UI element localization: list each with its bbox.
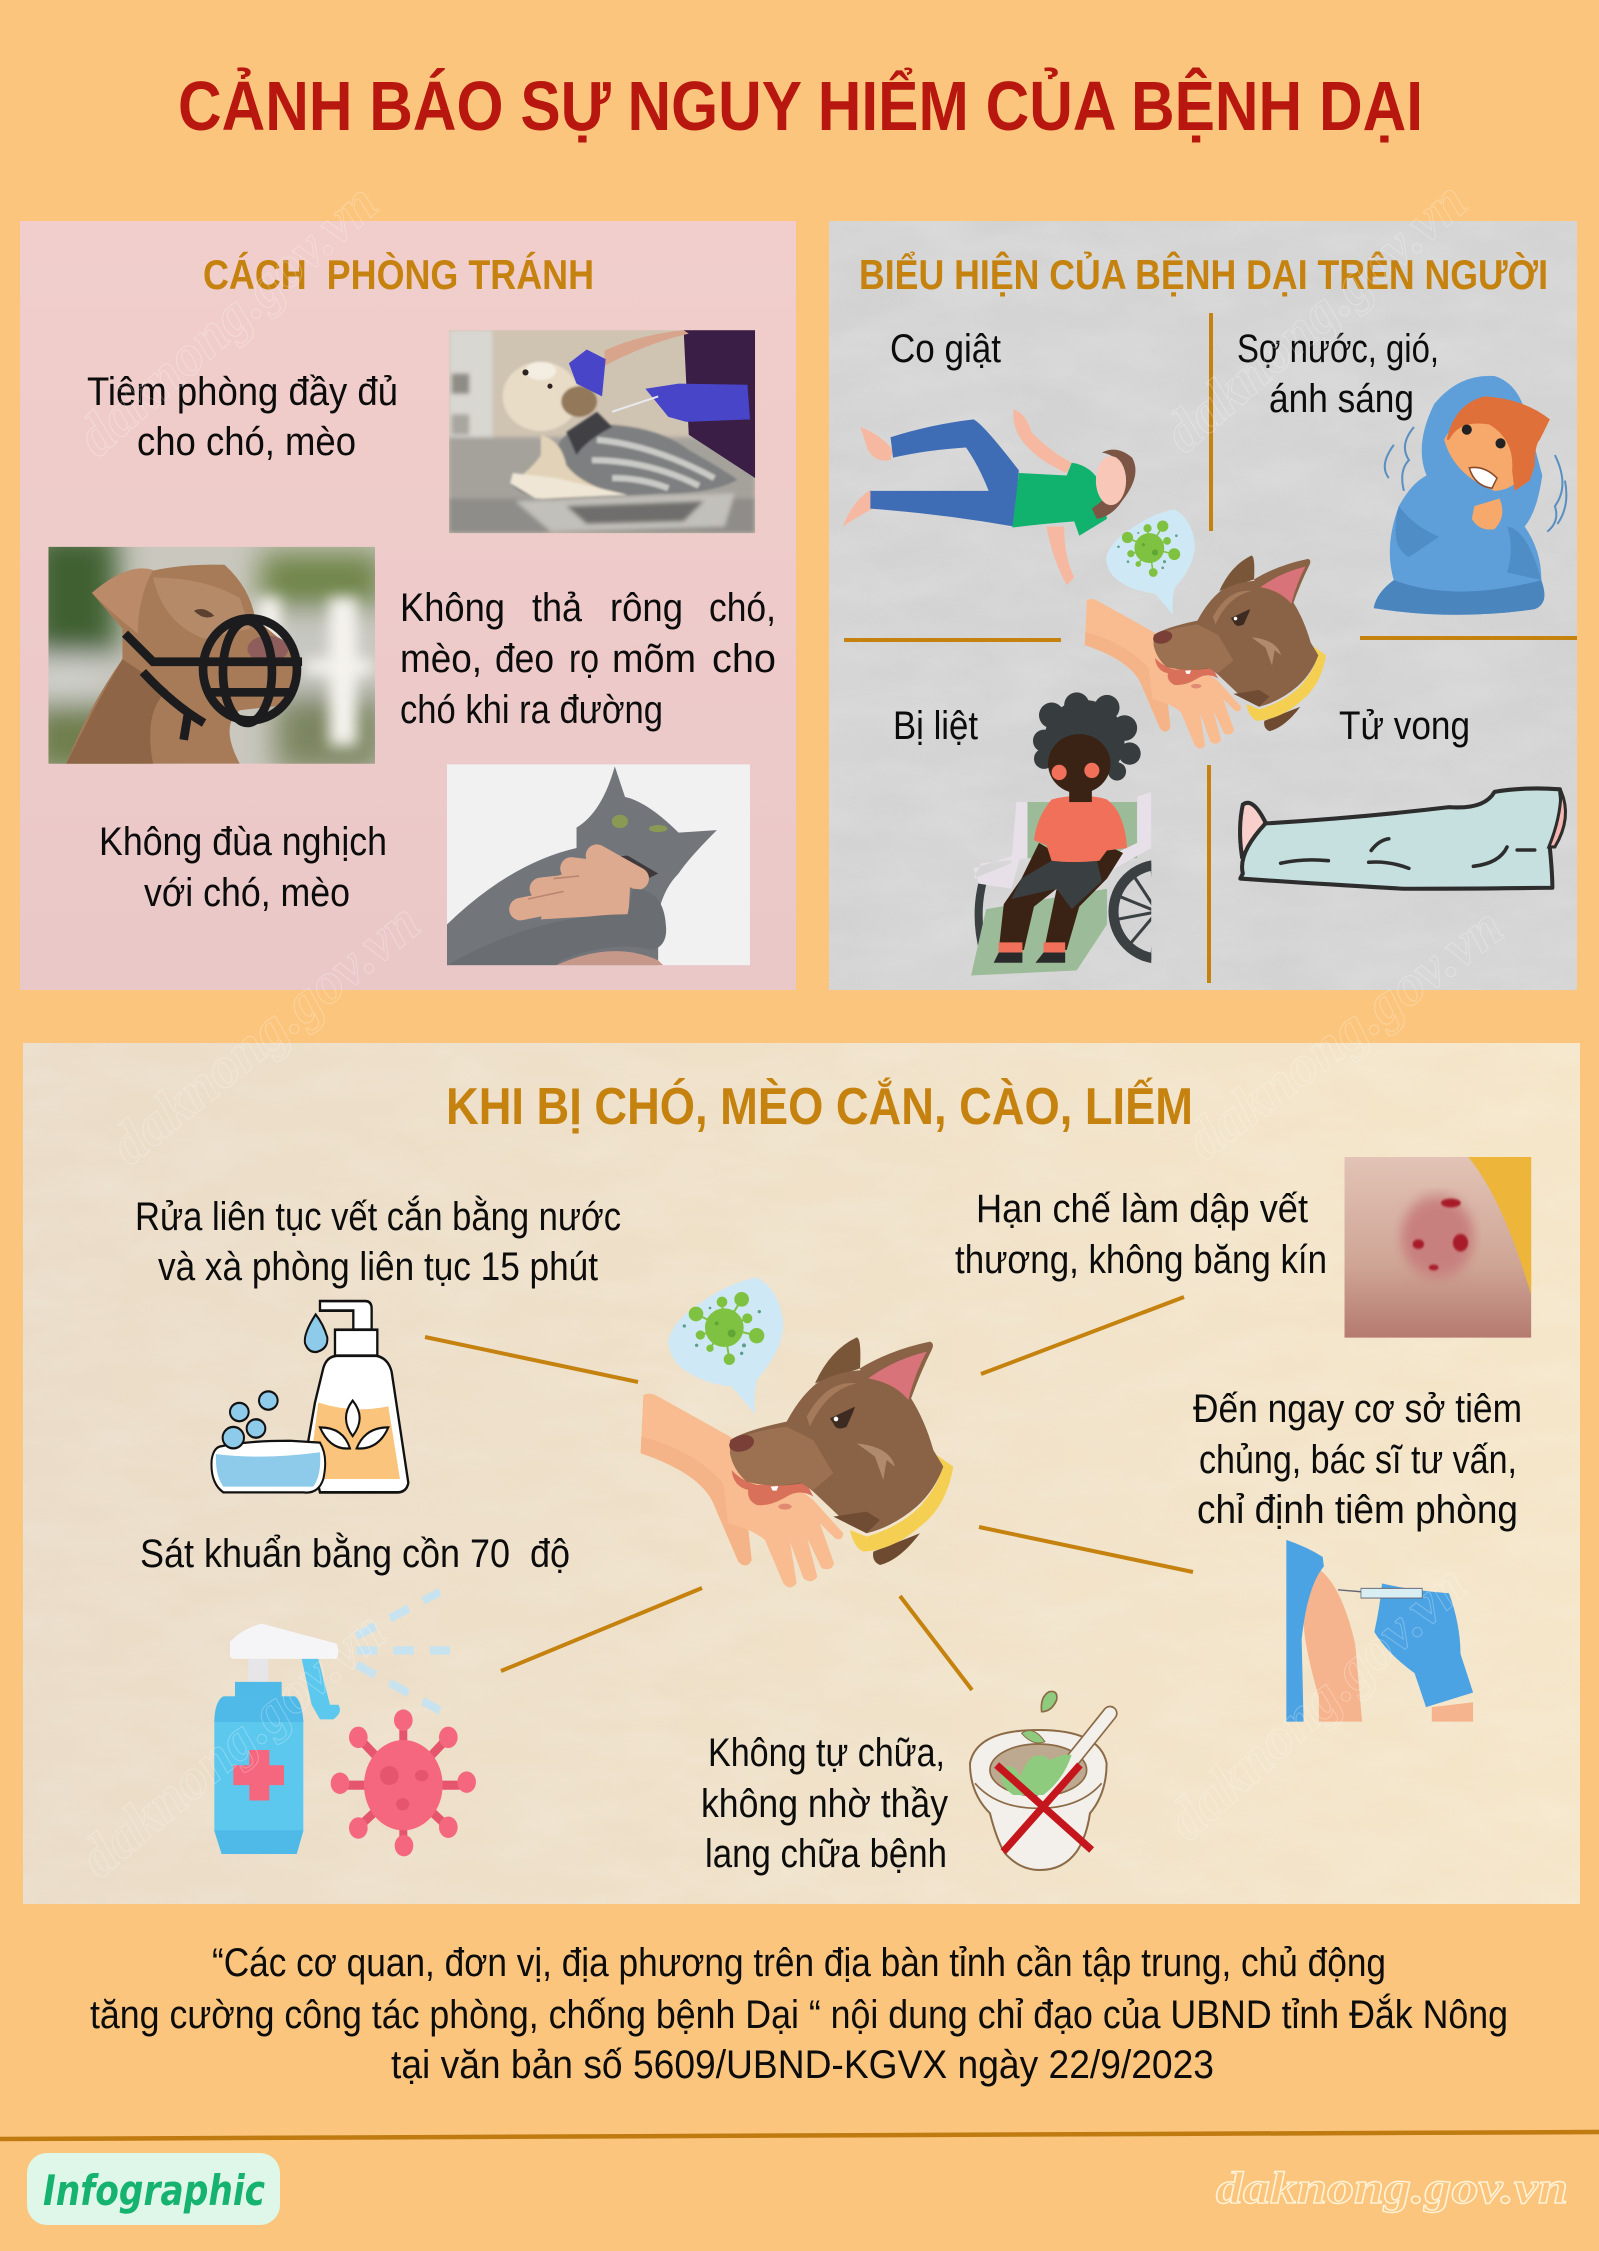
text: convulsions: Co giật [890,327,1001,371]
text: avoid crushing wound: thương, không băng kín [955,1238,1327,1282]
heading: prevention: CÁCH PHÒNG TRÁNH [203,250,594,298]
text: keep pets leashed, use muzzle: thả [532,586,583,630]
text: vaccinate pets [87,370,398,464]
text: go to vaccination facility [1193,1387,1522,1532]
text: keep pets leashed, use muzzle: Không [400,586,505,630]
watermarks: daknong.gov.vn [1154,1551,1479,1853]
badge: Infographic [27,2153,280,2225]
text: fear of water, wind, light: ánh sáng [1269,377,1414,421]
watermarks: daknong.gov.vn [97,889,432,1177]
text: keep pets leashed, use muzzle: rông [610,586,683,630]
panel background: prevention [20,221,796,990]
text: wash the wound [135,1194,621,1289]
text: fear of water, wind, light [1237,327,1439,421]
watermarks: daknong.gov.vn [1174,893,1515,1172]
photo: dog being vaccinated [449,330,755,533]
text: keep pets leashed, use muzzle: đeo [495,637,554,681]
site name: daknong.gov.vn: daknong.gov.vn [1216,2162,1568,2213]
icon: mortar with red cross [970,1691,1110,1870]
text: vaccinate pets: cho chó, mèo [137,420,356,464]
text: go to vaccination facility: Đến ngay cơ sở tiêm [1193,1387,1522,1431]
text: go to vaccination facility: chủng, bác sĩ tư vấn, [1199,1438,1517,1482]
text: death: Tử vong [1339,704,1470,748]
icon: person in wheelchair [971,692,1152,976]
text: keep pets leashed, use muzzle: cho [712,637,776,681]
text: keep pets leashed, use muzzle: chó, [709,586,776,630]
text: do not tease pets: với chó, mèo [144,871,350,915]
photo: bite wound [1345,1157,1531,1338]
icon: person shivering in blanket [1374,376,1566,615]
icon: soap and pump bottle [211,1301,408,1493]
text: keep pets leashed, use muzzle: rọ [569,637,599,681]
text: vaccinate pets: Tiêm phòng đầy đủ [87,370,398,414]
text: no self treatment [701,1731,948,1876]
text: do not tease pets [99,820,387,915]
text: disinfect with alcohol: Sát khuẩn bằng cồn 70 độ [140,1531,570,1576]
watermarks [64,168,1515,1890]
panel: symptoms [829,221,1577,990]
icon: body under shroud [1240,788,1566,889]
text: keep pets leashed, use muzzle: chó khi ra đường [400,688,663,732]
footer divider [0,2132,1599,2139]
panel: when bitten [23,168,1580,1904]
quote text [90,1941,1508,2087]
photo: muzzled dog [48,546,375,764]
text: avoid crushing wound: Hạn chế làm dập vết [976,1187,1308,1231]
text: wash the wound: Rửa liên tục vết cắn bằng nước [135,1194,621,1239]
heading: when bitten: KHI BỊ CHÓ, MÈO CẮN, CÀO, LIẾM [446,1077,1193,1136]
text: keep pets leashed, use muzzle: mõm [612,637,696,681]
text: paralysis: Bị liệt [893,704,978,748]
text: do not tease pets: Không đùa nghịch [99,820,387,864]
icon: convulsing person [843,409,1135,585]
text: go to vaccination facility: chỉ định tiêm phòng [1197,1488,1518,1532]
watermarks: daknong.gov.vn [64,170,390,469]
quote text: “Các cơ quan, đơn vị, địa phương trên địa bàn tỉnh cần tập trung, chủ động [212,1941,1386,1985]
panel background: symptoms [829,221,1577,990]
title: CẢNH BÁO SỰ NGUY HIỂM CỦA BỆNH DẠI [178,66,1423,145]
icon: spray bottle and virus [214,1592,476,1856]
watermarks: daknong.gov.vn [1151,168,1479,465]
badge: Infographic: Infographic [43,2166,265,2215]
text: keep pets leashed, use muzzle: mèo, [400,637,482,681]
icon: injection in arm [1286,1540,1473,1722]
icon: dog biting hand (center) [641,1277,953,1587]
panel: prevention [20,221,796,990]
panel background: when bitten [23,1043,1580,1904]
icon: dog biting hand (symptoms) [1085,509,1326,749]
text: avoid crushing wound [955,1187,1327,1282]
text: fear of water, wind, light: Sợ nước, gió, [1237,327,1439,371]
text: wash the wound: và xà phòng liên tục 15 phút [158,1245,598,1289]
text: no self treatment: lang chữa bệnh [705,1832,947,1876]
photo: cat biting hand [447,764,750,965]
watermarks: daknong.gov.vn [67,1597,398,1890]
quote text: tại văn bản số 5609/UBND-KGVX ngày 22/9/2023 [391,2043,1214,2087]
text: no self treatment: Không tự chữa, [708,1731,945,1775]
text: no self treatment: không nhờ thầy [701,1782,948,1826]
